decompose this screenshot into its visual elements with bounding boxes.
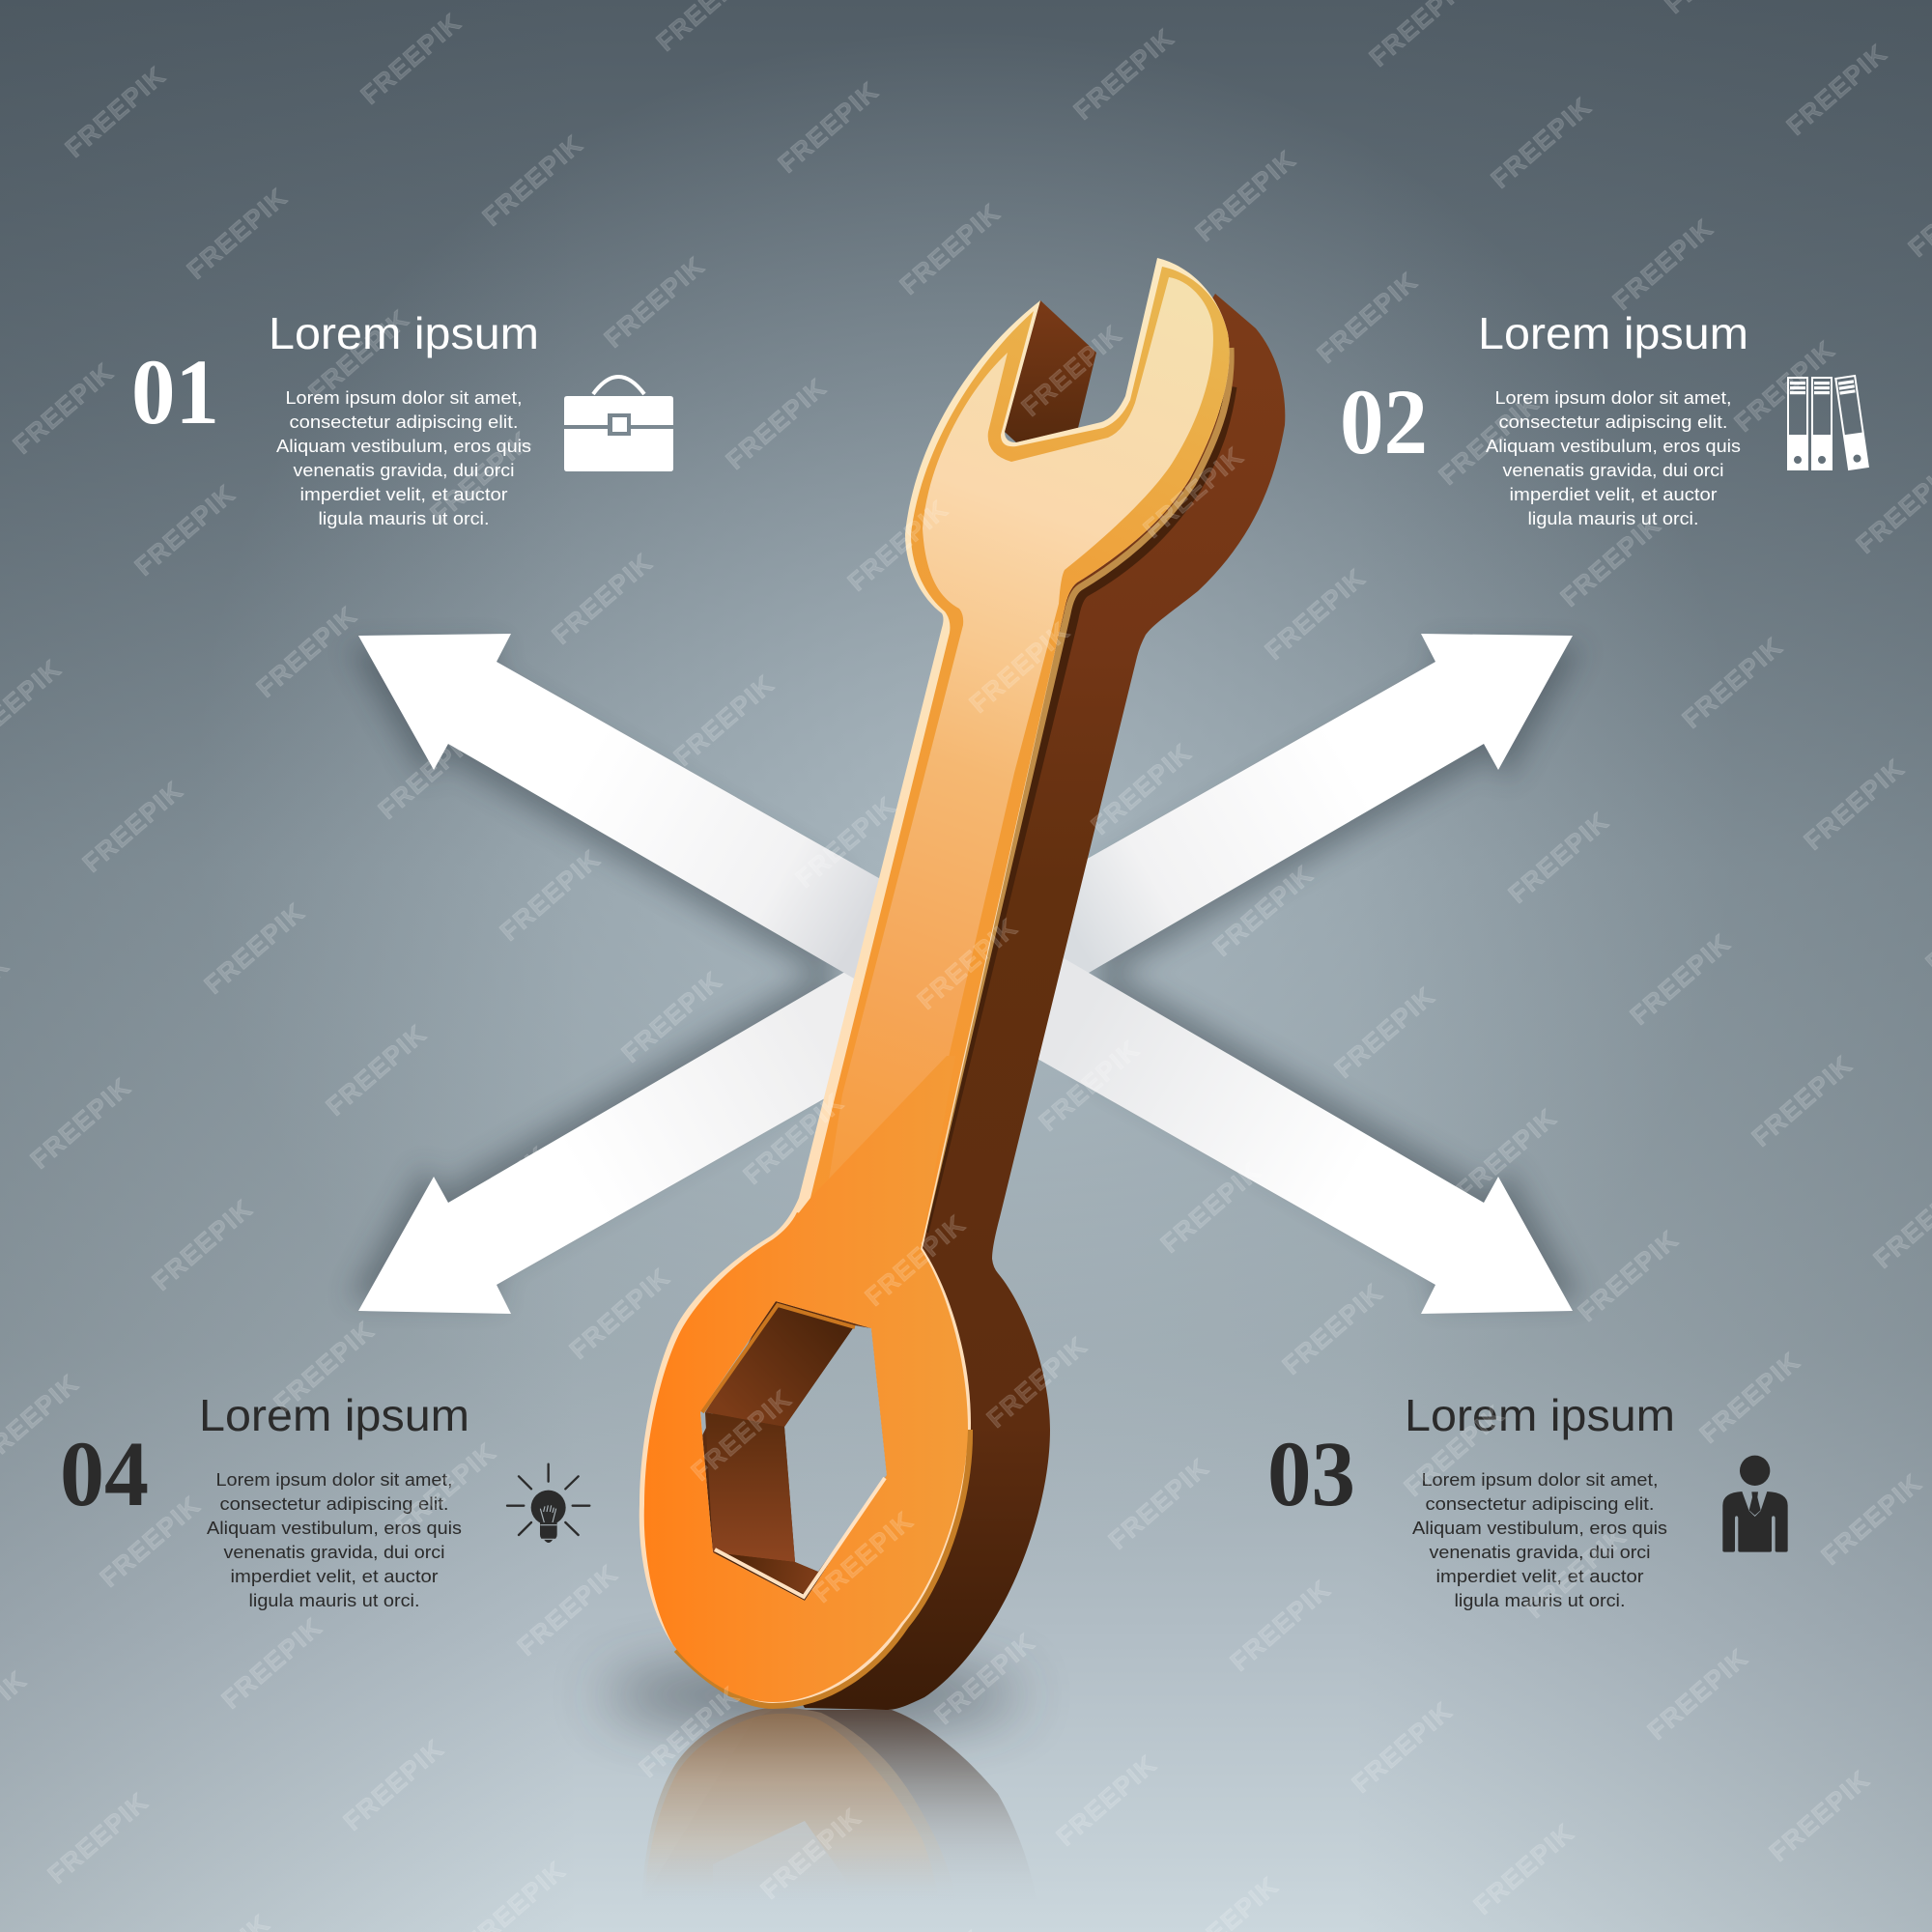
text 03: venenatis gravida, dui orci xyxy=(1430,1542,1650,1562)
head rim xyxy=(676,1430,970,1706)
text 04: Aliquam vestibulum, eros quis xyxy=(207,1518,462,1538)
text 02: imperdiet velit, et auctor xyxy=(1509,484,1718,504)
heading 01: Lorem ipsum xyxy=(269,308,539,358)
text 04: imperdiet velit, et auctor xyxy=(230,1566,439,1586)
text 02: Aliquam vestibulum, eros quis xyxy=(1486,436,1741,456)
text 03: consectetur adipiscing elit. xyxy=(1426,1493,1654,1514)
arrow: top left xyxy=(358,634,966,1043)
text 01: Lorem ipsum dolor sit amet, xyxy=(286,387,522,408)
text 04 xyxy=(207,1469,462,1610)
wrench side body xyxy=(676,294,1285,1710)
text 04: venenatis gravida, dui orci xyxy=(224,1542,444,1562)
text 01: imperdiet velit, et auctor xyxy=(299,484,508,504)
heading 04: Lorem ipsum xyxy=(199,1390,469,1440)
wrench head face xyxy=(644,1212,968,1702)
hexagon edge highlights xyxy=(702,1305,885,1597)
text 02 xyxy=(1486,387,1741,528)
text 01: consectetur adipiscing elit. xyxy=(290,412,518,432)
arrow: top right xyxy=(966,634,1573,973)
icon: light bulb xyxy=(507,1464,589,1543)
arrow shadows xyxy=(350,645,1581,1302)
icon: businessman xyxy=(1722,1456,1788,1552)
heading 03: Lorem ipsum xyxy=(1405,1390,1675,1440)
text 02: ligula mauris ut orci. xyxy=(1528,508,1698,528)
text 04: ligula mauris ut orci. xyxy=(249,1590,419,1610)
block 02 xyxy=(1340,308,1869,528)
text 01: Aliquam vestibulum, eros quis xyxy=(276,436,531,456)
text 01: ligula mauris ut orci. xyxy=(319,508,489,528)
text 02: consectetur adipiscing elit. xyxy=(1499,412,1727,432)
text 04: Lorem ipsum dolor sit amet, xyxy=(216,1469,452,1490)
wrench face inner xyxy=(821,277,1213,1233)
text 03: Aliquam vestibulum, eros quis xyxy=(1412,1518,1667,1538)
number 02: 02 xyxy=(1340,370,1428,473)
text 03: ligula mauris ut orci. xyxy=(1455,1590,1625,1610)
side rim tan xyxy=(921,348,1231,1241)
number 04: 04 xyxy=(60,1422,149,1525)
icon: briefcase xyxy=(564,377,673,471)
ground shadow xyxy=(604,1666,1019,1724)
text 01 xyxy=(276,387,531,528)
text 03: imperdiet velit, et auctor xyxy=(1435,1566,1644,1586)
text 02: venenatis gravida, dui orci xyxy=(1503,460,1723,480)
text 03 xyxy=(1412,1469,1667,1610)
block 03 xyxy=(1267,1390,1788,1610)
number 01: 01 xyxy=(131,340,219,443)
arrow: bottom right xyxy=(966,901,1573,1314)
side rim shadow xyxy=(923,386,1231,1232)
hexagon walls xyxy=(705,1301,855,1594)
text 04: consectetur adipiscing elit. xyxy=(220,1493,448,1514)
arrow: bottom left xyxy=(358,973,966,1314)
block 04 xyxy=(60,1390,589,1610)
block 01 xyxy=(131,308,673,528)
text 02: Lorem ipsum dolor sit amet, xyxy=(1495,387,1731,408)
number 03: 03 xyxy=(1267,1422,1355,1525)
text 01: venenatis gravida, dui orci xyxy=(294,460,514,480)
shaft gloss edge xyxy=(797,1056,955,1249)
wrench xyxy=(639,258,1285,1710)
wrench face band xyxy=(797,267,1230,1249)
icon: binders xyxy=(1787,375,1869,470)
text 03: Lorem ipsum dolor sit amet, xyxy=(1422,1469,1658,1490)
heading 02: Lorem ipsum xyxy=(1478,308,1748,358)
wrench reflection xyxy=(642,1708,1037,1900)
jaw inner wall xyxy=(1005,300,1096,442)
wrench face highlight xyxy=(639,258,1230,1708)
